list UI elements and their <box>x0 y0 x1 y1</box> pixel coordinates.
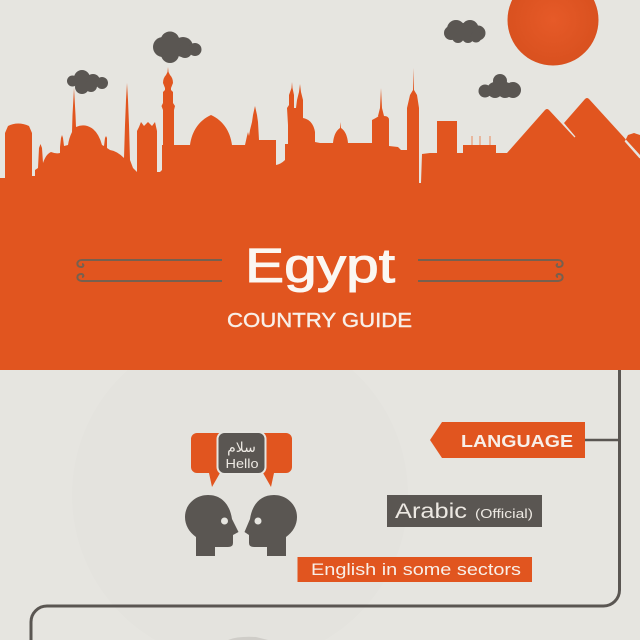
right head <box>244 495 297 556</box>
label: Arabic official: Arabic <box>395 500 467 523</box>
center greeting bubble: Hello <box>226 456 258 471</box>
icon: two people talking with speech bubbles <box>185 432 297 556</box>
center greeting bubble: سلام <box>227 440 256 456</box>
title: Egypt <box>245 240 395 293</box>
left head <box>185 495 238 556</box>
icon: cloud near sun <box>444 20 486 43</box>
title ornament right <box>418 260 563 281</box>
language heading tag <box>430 422 585 458</box>
right speech bubble <box>258 433 292 487</box>
connector from language tag <box>585 439 619 441</box>
title ornament left <box>77 260 222 281</box>
icon: sun <box>508 0 598 66</box>
subtitle: COUNTRY GUIDE <box>227 310 412 332</box>
label: English in some sectors <box>298 557 532 582</box>
left speech bubble <box>191 433 225 487</box>
panel frame: language section connector line <box>31 370 620 640</box>
center greeting bubble <box>218 432 266 474</box>
language heading tag: LANGUAGE <box>461 431 573 451</box>
icon: cloud left <box>67 70 108 94</box>
pyramid edge highlight <box>564 124 640 158</box>
next section icon hint <box>228 637 268 640</box>
label: Arabic official: (Official) <box>475 506 533 521</box>
icon: cloud above pyramids <box>478 74 521 98</box>
icon: cloud above minaret <box>153 32 202 63</box>
label: Arabic official <box>387 495 542 527</box>
label: English in some sectors: English in some sectors <box>311 560 521 579</box>
city skyline and orange header panel <box>0 67 640 370</box>
rooftop flags <box>472 136 490 145</box>
